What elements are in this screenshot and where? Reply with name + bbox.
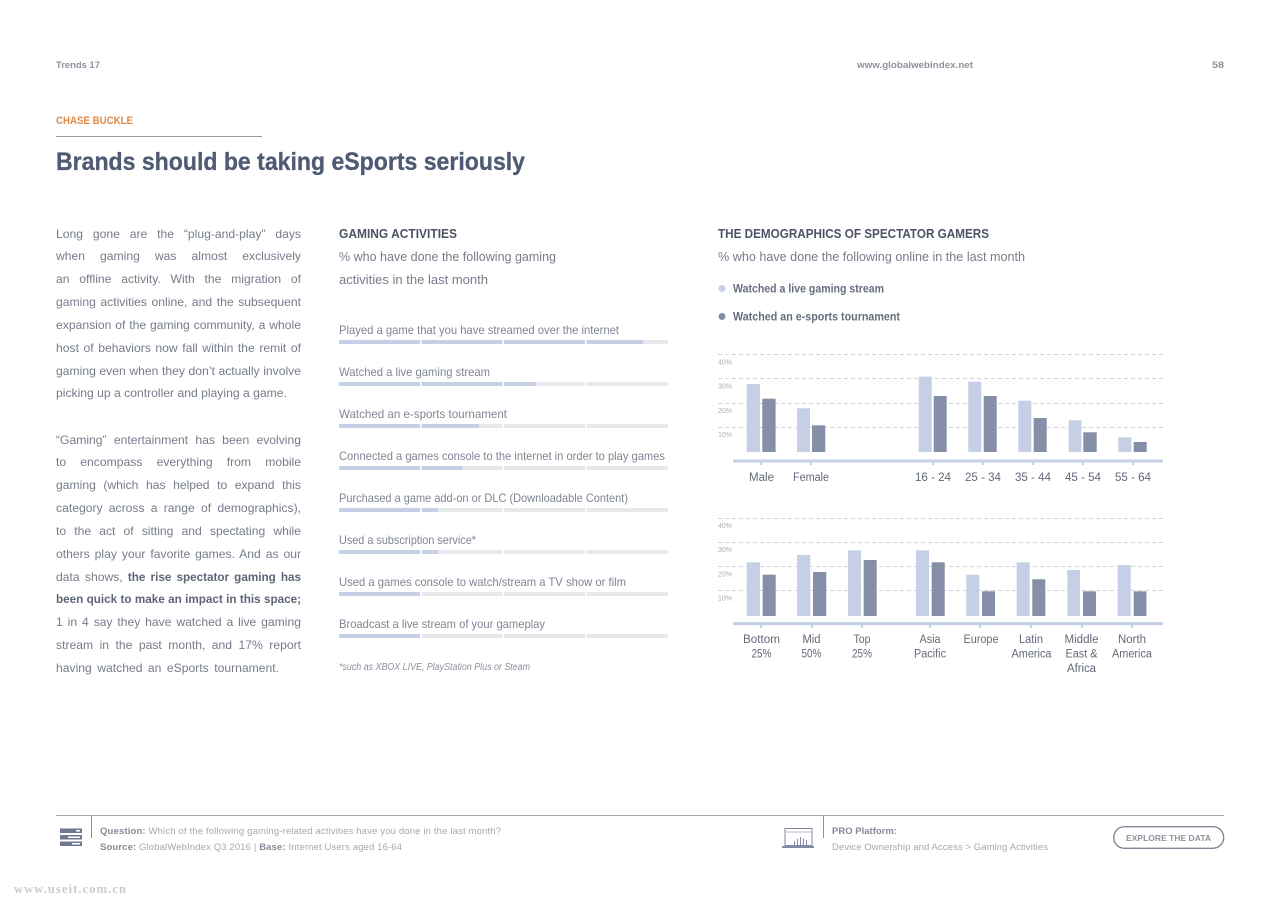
chart: gender and age: 20%: [718, 408, 732, 415]
chart: income and region: 25%: [752, 648, 772, 660]
footer: pro platform: [832, 826, 1048, 853]
button: explore the data: [1114, 827, 1224, 848]
page header: www.globalwebindex.net: [856, 60, 974, 71]
body copy: paragraph 2: to the act of sitting and spectating while: [56, 524, 301, 538]
chart: income and region: Middle: [1064, 634, 1098, 646]
bar: purchased a game add-on: Purchased a game add-on or DLC (Downloadable Content): [339, 491, 628, 505]
body copy: paragraph 2: 1 in 4 say they have watched a live gaming: [56, 615, 301, 629]
body copy: paragraph 2: gaming (which has helped to expand this: [56, 478, 301, 492]
body copy: paragraph 1: an offline activity. With the migration of: [56, 272, 301, 286]
bar: broadcast a live stream: [339, 617, 668, 638]
title: Brands should be taking eSports seriously: [56, 148, 525, 176]
chart: gender and age: 45 - 54: [1065, 472, 1102, 484]
footnote: *such as XBOX LIVE, PlayStation Plus or Steam: [339, 662, 530, 673]
body copy: paragraph 2: data shows, the rise spectator gaming has: [56, 570, 301, 584]
body copy: paragraph 1: when gaming was almost exclusively: [56, 249, 301, 263]
bar: watched a live gaming stream: [339, 365, 668, 386]
body copy: paragraph 1: [56, 226, 301, 400]
chart: income and region: Latin: [1019, 634, 1043, 646]
page header: 58: [1212, 60, 1224, 71]
body copy: paragraph 1: gaming activities online, and the subsequent: [56, 295, 301, 309]
body copy: paragraph 2: having watched an eSports tournament.: [56, 661, 279, 675]
body copy: paragraph 1: host of behaviors now fall within the remit of: [56, 341, 301, 355]
demographics heading: % who have done the following online in the last month: [718, 250, 1025, 264]
footer: question and source: Question: Which of the following gaming-related activities have you done in the last month?: [100, 826, 501, 837]
gaming activities heading: [339, 227, 556, 287]
author name: CHASE BUCKLE: [56, 115, 133, 127]
body copy: paragraph 1: picking up a controller and playing a game.: [56, 386, 287, 400]
body copy: paragraph 2: been quick to make an impact in this space;: [56, 593, 301, 606]
page header: Trends 17: [56, 60, 100, 71]
gaming activities heading: % who have done the following gaming: [339, 250, 556, 264]
chart: income and region: Asia: [920, 634, 941, 646]
body copy: paragraph 1: Long gone are the “plug-and-play” days: [56, 226, 301, 240]
footer: pro platform: PRO Platform:: [832, 826, 897, 837]
footer: question and source: Source: GlobalWebIndex Q3 2016 | Base: Internet Users aged 16-64: [100, 842, 402, 853]
body copy: paragraph 2: stream in the past month, and 17% report: [56, 638, 301, 652]
bar: used a subscription service: [339, 533, 668, 554]
chart: income and region: Africa: [1067, 663, 1097, 675]
body copy: paragraph 1: expansion of the gaming community, a whole: [56, 318, 301, 332]
gaming activities heading: activities in the last month: [339, 273, 488, 287]
body copy: paragraph 2: “Gaming” entertainment has been evolving: [56, 432, 301, 446]
chart: gender and age: Male: [749, 472, 774, 484]
icon: laptop with chart: [782, 828, 814, 848]
chart: income and region: Europe: [964, 634, 998, 646]
bar: played a game streamed: Played a game that you have streamed over the internet: [339, 323, 620, 337]
chart: income and region: 40%: [718, 523, 732, 530]
footer rule: [56, 815, 1224, 816]
chart: gender and age: 16 - 24: [915, 472, 952, 484]
chart: income and region: America: [1112, 648, 1153, 660]
chart: income and region: [718, 518, 1163, 675]
chart: income and region: 50%: [802, 648, 822, 660]
chart: income and region: 10%: [718, 596, 732, 602]
chart: income and region: Top: [854, 634, 870, 646]
watermark: www.useit.com.cn: [14, 882, 126, 896]
gaming activities bar list: [339, 323, 668, 638]
chart: income and region: 25%: [852, 648, 872, 660]
bar: watched a live gaming stream: Watched a live gaming stream: [339, 365, 490, 379]
icon: server stack: [60, 828, 82, 846]
chart: gender and age: 30%: [718, 384, 732, 390]
chart: gender and age: 35 - 44: [1015, 472, 1052, 484]
bar: played a game streamed: [339, 323, 668, 344]
bar: purchased a game add-on: [339, 491, 668, 512]
legend: Watched a live gaming stream: [733, 284, 884, 296]
bar: broadcast a live stream: Broadcast a live stream of your gameplay: [339, 617, 545, 631]
gaming activities heading: GAMING ACTIVITIES: [339, 227, 457, 241]
chart: gender and age: Female: [793, 472, 829, 484]
body copy: paragraph 2: [56, 432, 301, 675]
demographics heading: [718, 227, 1025, 264]
chart: gender and age: 10%: [718, 432, 732, 439]
body copy: paragraph 2: others play your favorite games. And as our: [56, 547, 301, 561]
body copy: paragraph 2: category across a range of demographics),: [56, 501, 301, 515]
bar: used a console to watch TV: [339, 575, 668, 596]
bar: watched an e-sports tournament: [339, 407, 668, 428]
chart: income and region: 30%: [718, 547, 732, 554]
chart: gender and age: 25 - 34: [965, 472, 1002, 484]
bar: connected a games console: [339, 449, 668, 470]
legend: [718, 284, 900, 324]
chart: income and region: 20%: [718, 572, 732, 578]
chart: income and region: North: [1118, 634, 1146, 646]
body copy: paragraph 2: to encompass everything from mobile: [56, 455, 301, 469]
chart: income and region: Pacific: [914, 648, 946, 660]
bar: connected a games console: Connected a games console to the internet in order to play games: [339, 449, 665, 463]
footer: pro platform: Device Ownership and Access > Gaming Activities: [832, 842, 1048, 853]
bar: used a console to watch TV: Used a games console to watch/stream a TV show or film: [339, 575, 626, 589]
legend: Watched an e-sports tournament: [733, 312, 900, 324]
chart: gender and age: 40%: [718, 360, 732, 366]
body copy: paragraph 1: gaming even when they don’t actually involve: [56, 364, 301, 378]
chart: income and region: Mid: [802, 634, 820, 646]
chart: income and region: Bottom: [743, 634, 780, 646]
chart: income and region: East &: [1066, 648, 1098, 660]
button: explore the data: EXPLORE THE DATA: [1126, 833, 1211, 843]
bar: watched an e-sports tournament: Watched an e-sports tournament: [339, 407, 508, 421]
chart: gender and age: 55 - 64: [1115, 472, 1152, 484]
demographics heading: THE DEMOGRAPHICS OF SPECTATOR GAMERS: [718, 227, 989, 241]
footer: question and source: [100, 826, 501, 853]
page header: [56, 60, 1224, 71]
chart: income and region: America: [1012, 648, 1052, 660]
bar: used a subscription service: Used a subscription service*: [339, 533, 476, 547]
chart: gender and age: [718, 354, 1163, 484]
